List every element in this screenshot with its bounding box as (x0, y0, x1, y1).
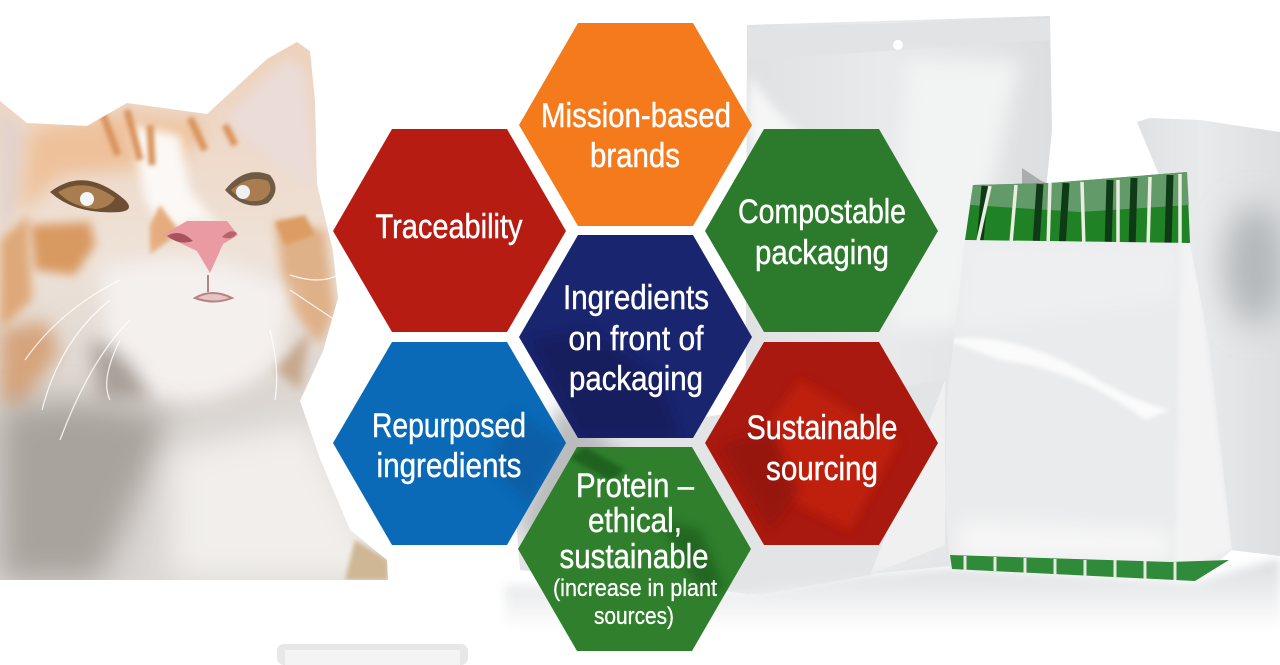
whiskers (25, 275, 338, 440)
hexagon: Ingredients on front of packaging (519, 235, 752, 438)
hexagon: Mission-based brands (519, 23, 752, 226)
hexagon: Mission-based brands: brands (590, 137, 680, 175)
photo: packaging bags (505, 16, 1280, 630)
hexagon: Protein – ethical, sustainable: sustainable (560, 538, 708, 576)
back right bag (1137, 118, 1280, 556)
icon: left eye (50, 180, 129, 212)
hexagon: Repurposed ingredients (333, 342, 566, 545)
hexagon: Traceability (333, 129, 566, 332)
hexagon: Protein – ethical, sustainable: sources) (594, 603, 674, 630)
hexagon: Protein – ethical, sustainable: ethical, (588, 502, 682, 540)
hexagon: Compostable packaging: Compostable (738, 193, 906, 231)
hexagon: Protein – ethical, sustainable: Protein – (576, 467, 694, 505)
hexagon: Repurposed ingredients: ingredients (376, 447, 522, 485)
icon: right eye (225, 172, 276, 206)
photo: jar lid (277, 644, 468, 665)
hexagon: Protein – ethical, sustainable: (increase in plant (553, 575, 717, 602)
front bag bottom band (950, 555, 1229, 581)
hexagon: Compostable packaging (705, 129, 938, 332)
hexagon: Sustainable sourcing: sourcing (766, 450, 878, 488)
hexagon: Protein – ethical, sustainable (518, 447, 751, 651)
hexagon: Mission-based brands: Mission-based (541, 97, 731, 135)
front bag top band (965, 168, 1190, 250)
hexagon: Repurposed ingredients: Repurposed (372, 407, 526, 445)
hexagon: Ingredients on front of packaging: Ingredients (563, 279, 709, 317)
hexagon: Compostable packaging: packaging (755, 234, 889, 272)
hexagon: Sustainable sourcing (705, 342, 938, 545)
hexagon: Traceability: Traceability (376, 208, 522, 246)
icon: nose (163, 221, 238, 273)
hexagon: Sustainable sourcing: Sustainable (746, 409, 898, 447)
hexagon: Ingredients on front of packaging: packaging (569, 360, 703, 398)
tall back bag (745, 16, 1052, 595)
crumpled front left bag (510, 380, 945, 595)
photo: cat (0, 42, 388, 580)
cat mouth (195, 275, 232, 302)
floor reflection (505, 558, 1280, 630)
front bag body (945, 240, 1232, 581)
hexagon: Ingredients on front of packaging: on front of (568, 320, 704, 358)
